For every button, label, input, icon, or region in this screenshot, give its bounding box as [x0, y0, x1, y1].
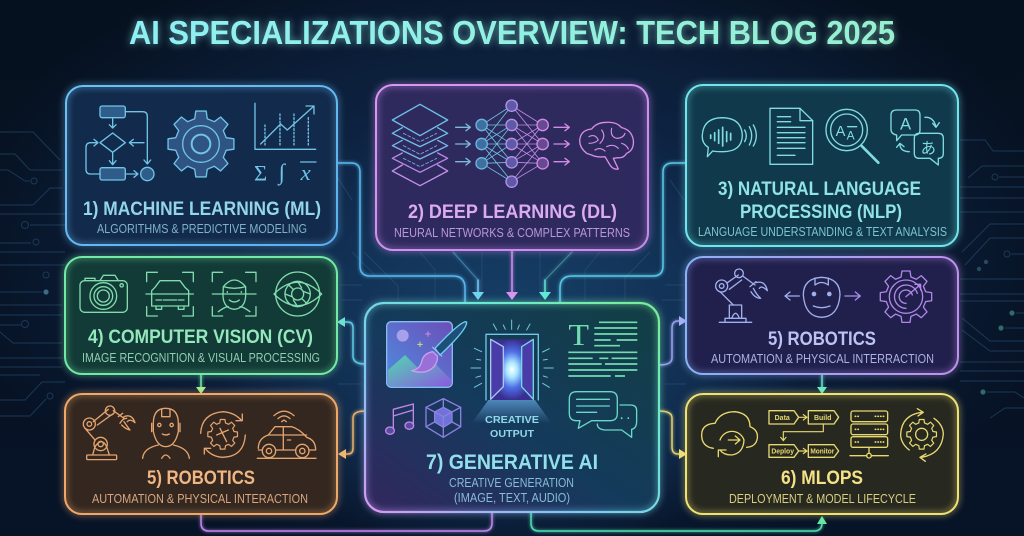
icons: cloud, pipeline, servers, gear cycle: Monitor: [810, 448, 835, 455]
icons: cloud, pipeline, servers, gear cycle: Data: [775, 415, 790, 422]
panel: machine learning: [66, 86, 337, 245]
subtitle: computer vision: IMAGE RECOGNITION & VISUAL PROCESSING: [82, 351, 320, 365]
heading: machine learning: 1) MACHINE LEARNING (ML): [83, 198, 321, 220]
icons: speech, document, magnifier, translation: A: [836, 124, 846, 140]
subtitle: generative AI: (IMAGE, TEXT, AUDIO): [454, 491, 570, 505]
icons: image and brush, music, cube, portal, text, chat: T: [568, 318, 589, 352]
subtitle: deep learning: NEURAL NETWORKS & COMPLEX PATTERNS: [394, 226, 630, 240]
icons: flowchart, gear, chart and math symbols: x: [300, 160, 311, 185]
label: creative output: [485, 414, 539, 440]
icons: image and brush, music, cube, portal, text, chat: [386, 318, 637, 437]
icons: speech, document, magnifier, translation: A: [900, 114, 912, 133]
icons: layers, neural network, brain: [392, 100, 633, 187]
panel frame: robotics left: [65, 394, 337, 514]
heading: robotics right: 5) ROBOTICS: [768, 328, 876, 350]
title: AI SPECIALIZATIONS OVERVIEW: TECH BLOG 2025: [129, 14, 895, 51]
subtitle: robotics right: AUTOMATION & PHYSICAL INTERRACTION: [711, 352, 934, 366]
icons: speech, document, magnifier, translation: あ: [921, 140, 936, 157]
panel: deep learning: [376, 85, 648, 250]
icons: speech, document, magnifier, translation: [702, 108, 943, 165]
panel frame: MLOps: [686, 394, 958, 514]
panel frame: deep learning: [376, 85, 648, 250]
icons: robot arm, robot head, target gear: [716, 269, 932, 322]
background circuit traces: [0, 132, 1024, 418]
icons: cloud, pipeline, servers, gear cycle: [702, 409, 943, 461]
panel frame: generative AI: [365, 303, 659, 512]
panel: robotics (left): [65, 394, 337, 514]
subtitle: machine learning: ALGORITHMS & PREDICTIVE MODELING: [97, 222, 307, 236]
panel: robotics (right): [686, 257, 958, 374]
heading: natural language processing: 3) NATURAL LANGUAGE: [718, 178, 921, 200]
icons: flowchart, gear, chart and math symbols: [86, 103, 316, 186]
panel frame: machine learning: [66, 86, 337, 245]
icons: flowchart, gear, chart and math symbols: Σ: [254, 161, 267, 186]
panel: MLOps: [686, 394, 958, 514]
subtitle: robotics left: AUTOMATION & PHYSICAL INTERACTION: [92, 492, 308, 506]
subtitle: NLP: LANGUAGE UNDERSTANDING & TEXT ANALYSIS: [698, 225, 947, 239]
heading: MLOps: 6) MLOPS: [781, 467, 863, 489]
subtitle: generative AI: [449, 476, 574, 505]
heading: robotics left: 5) ROBOTICS: [147, 467, 255, 489]
heading: natural language processing: PROCESSING (NLP): [740, 201, 902, 223]
icons: cloud, pipeline, servers, gear cycle: Deploy: [771, 448, 794, 455]
icons: flowchart, gear, chart and math symbols: ∫: [277, 159, 287, 186]
heading: deep learning: 2) DEEP LEARNING (DL): [408, 201, 617, 223]
panel: generative AI: [365, 303, 659, 512]
heading: natural language processing: [718, 178, 921, 223]
panel frame: NLP: [686, 85, 958, 246]
subtitle: generative AI: CREATIVE GENERATION: [449, 476, 574, 490]
subtitle: MLOps: DEPLOYMENT & MODEL LIFECYCLE: [729, 492, 916, 506]
heading: computer vision: 4) COMPUTER VISION (CV): [88, 326, 313, 348]
panel: natural language processing: [686, 85, 958, 246]
label: creative output: OUTPUT: [490, 428, 535, 440]
heading: generative AI: 7) GENERATIVE AI: [426, 451, 598, 474]
icons: cloud, pipeline, servers, gear cycle: Build: [814, 415, 831, 422]
connectors between panels: [196, 163, 827, 531]
icons: speech, document, magnifier, translation: A: [847, 128, 855, 142]
icons: robot arm, robot, gear cycle, connected car: [83, 406, 316, 460]
panel frame: computer vision: [65, 257, 337, 374]
icons: camera, car scan, face scan, eye: [80, 272, 322, 316]
panel: computer vision: [65, 257, 337, 374]
label: creative output: CREATIVE: [485, 414, 539, 426]
panel frame: robotics right: [686, 257, 958, 374]
